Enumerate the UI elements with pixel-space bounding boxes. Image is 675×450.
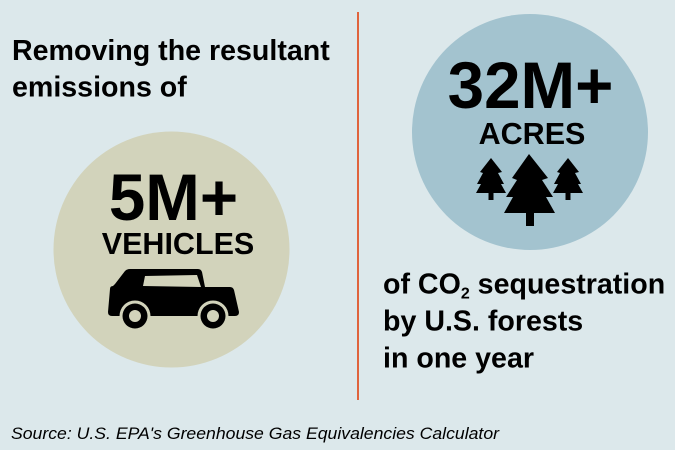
icon: car	[108, 269, 239, 332]
label: vehicles: VEHICLES	[102, 227, 254, 261]
text: sequestration description: by U.S. forests	[383, 306, 583, 338]
text: sequestration description	[383, 268, 665, 374]
stat: 5M+: 5M+	[109, 161, 238, 234]
panel: vehicles circle	[54, 132, 290, 368]
icon: large tree	[504, 154, 555, 226]
text: sequestration description: in one year	[383, 342, 534, 374]
label: acres: ACRES	[479, 117, 585, 151]
icon: left tree	[476, 158, 506, 200]
text: sequestration description: sequestration	[470, 268, 665, 300]
heading: removing emissions	[12, 35, 330, 104]
icon: right tree	[553, 158, 583, 200]
divider line	[357, 12, 359, 400]
text: sequestration description: 2	[461, 286, 470, 302]
heading: removing emissions: Removing the resultant	[12, 35, 330, 67]
source note: Source: U.S. EPA's Greenhouse Gas Equivalencies Calculator	[11, 425, 501, 443]
text: sequestration description: of CO	[383, 268, 461, 300]
stat: 32M+: 32M+	[448, 49, 613, 122]
heading: removing emissions: emissions of	[12, 72, 187, 104]
panel: acres circle	[412, 14, 648, 250]
